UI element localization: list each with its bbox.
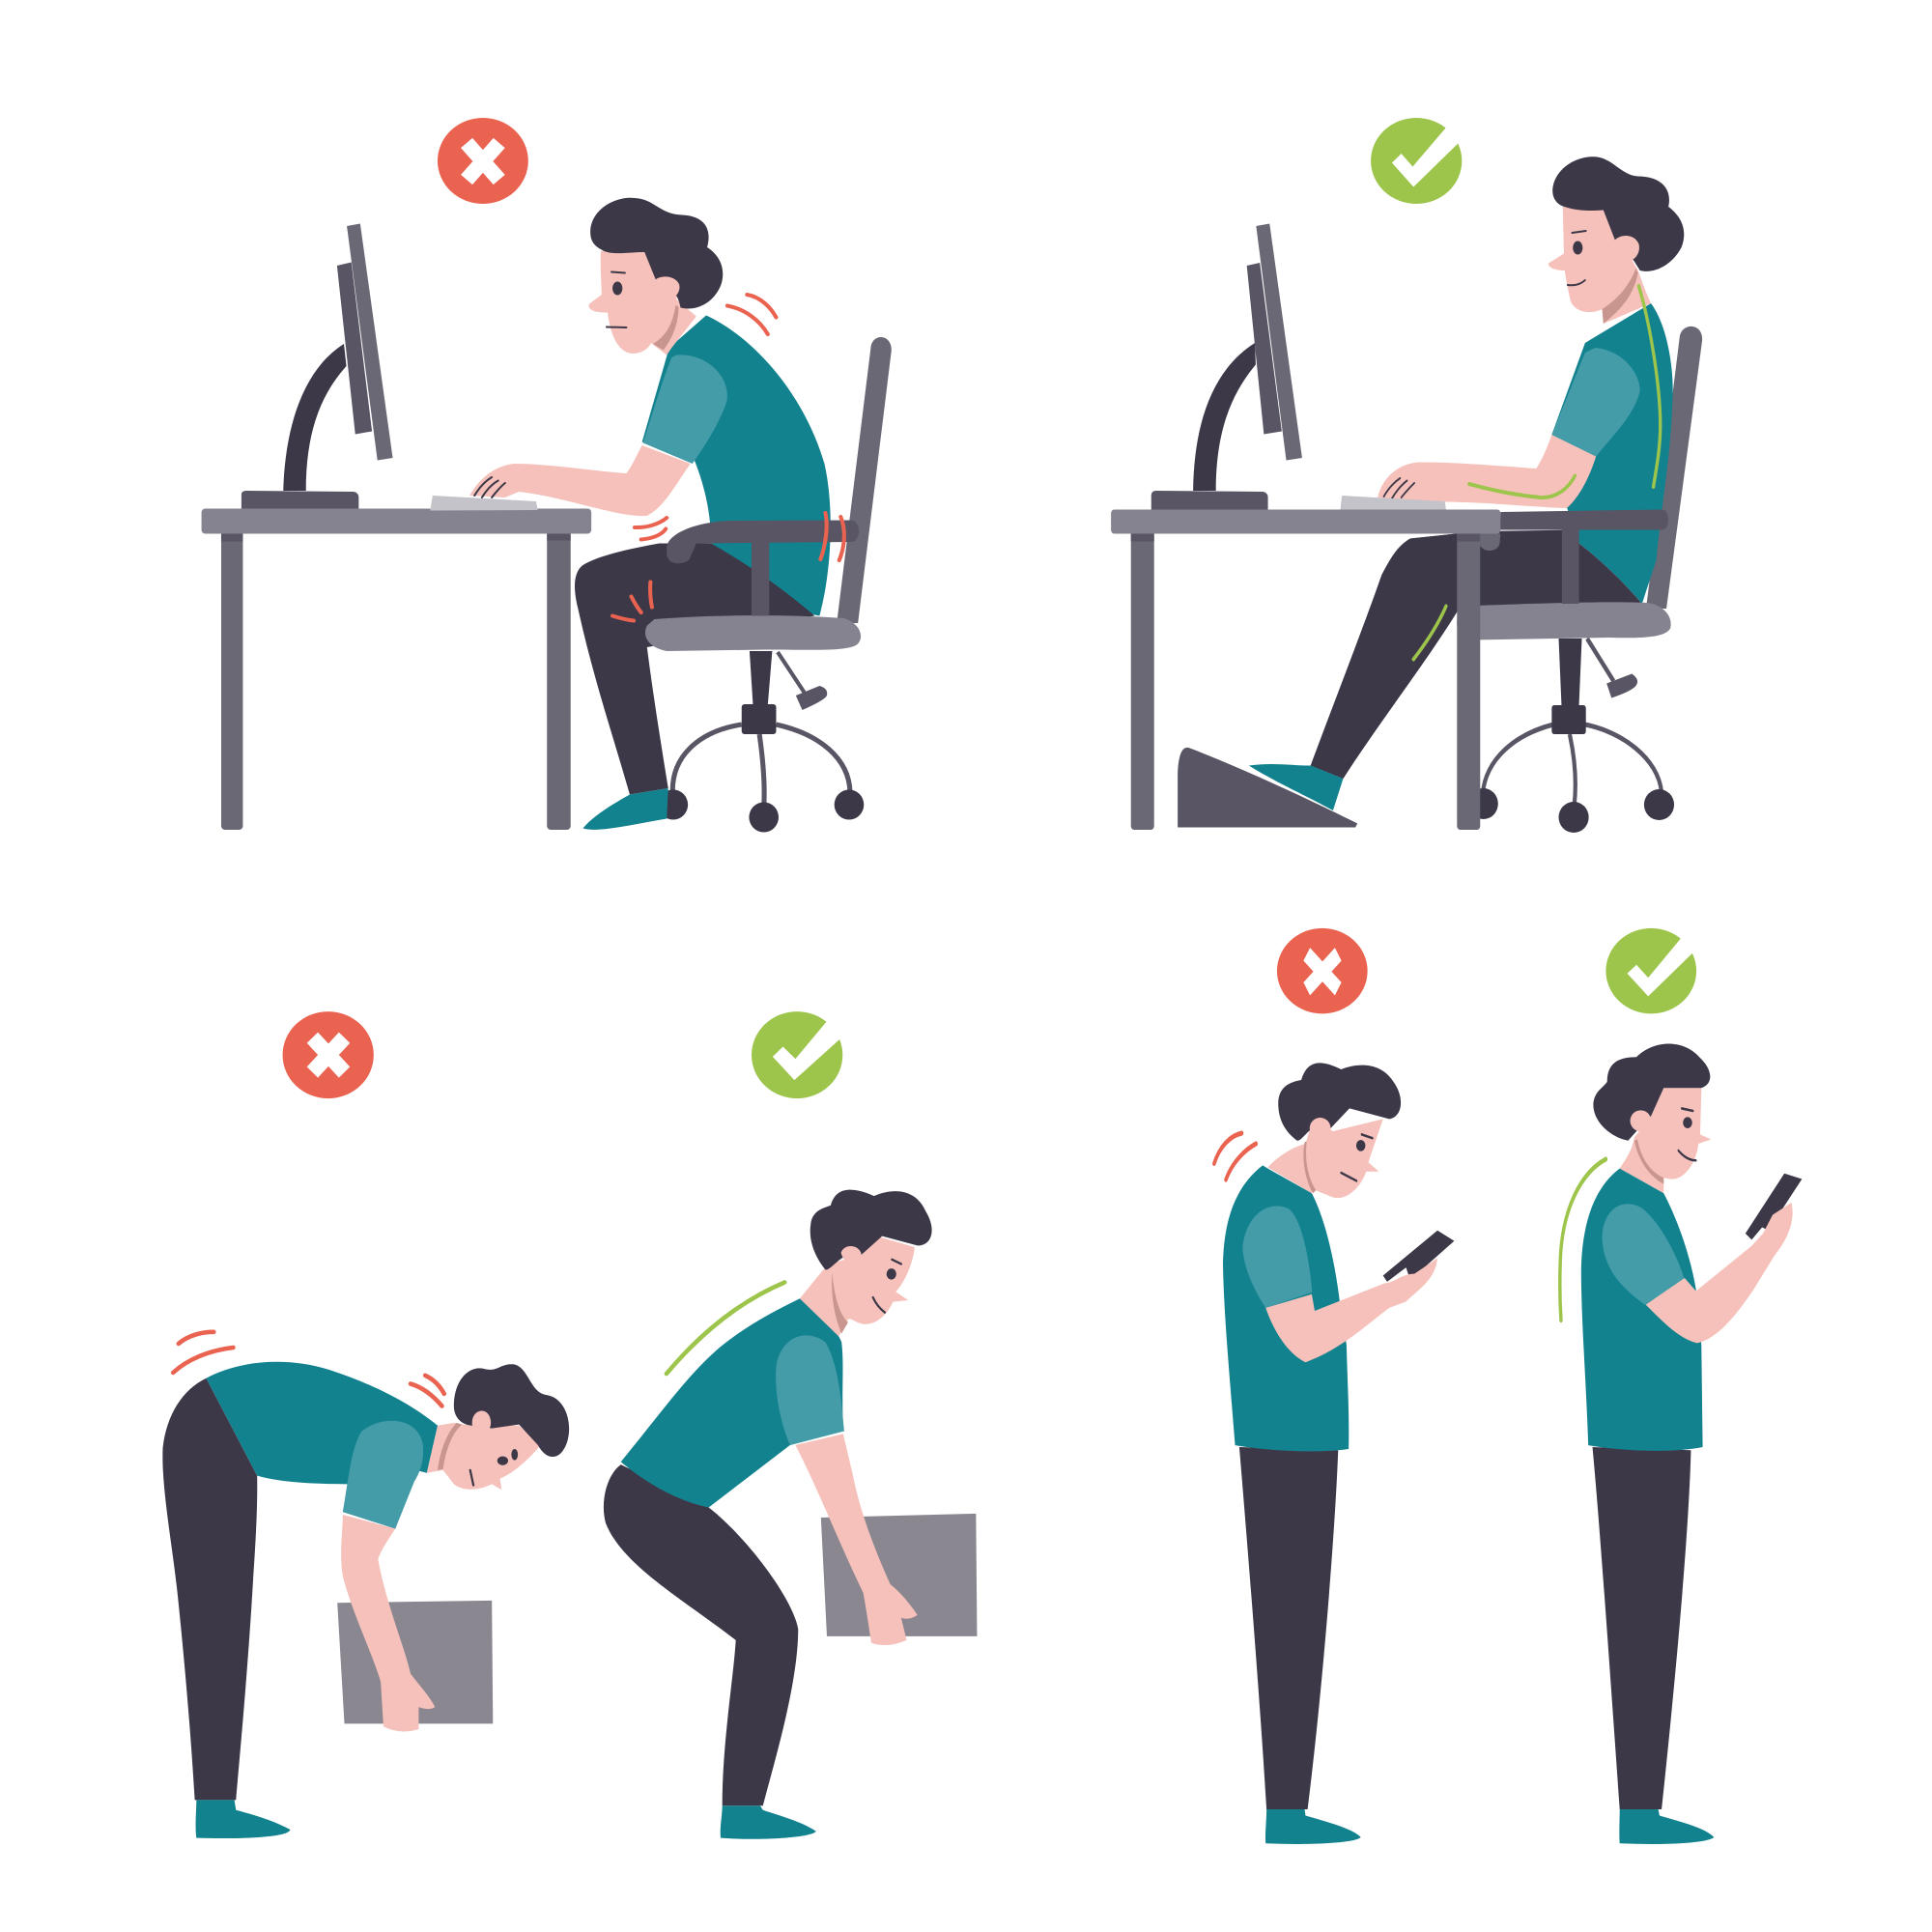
icon: green check badge bbox=[752, 1011, 842, 1098]
panel: bad phone posture bbox=[1214, 928, 1454, 1844]
man holding phone up bbox=[1581, 1044, 1802, 1844]
seated man slouching bbox=[469, 198, 831, 830]
icon: green check badge bbox=[1605, 928, 1696, 1013]
green posture marks bbox=[1413, 286, 1661, 659]
panel: bad lifting posture bbox=[162, 1011, 569, 1838]
phone bbox=[1746, 1174, 1802, 1239]
desk and armrest bbox=[1111, 496, 1668, 830]
red strain marks bbox=[173, 1332, 444, 1406]
icon: green check badge bbox=[1371, 118, 1462, 204]
forearm and hand bbox=[1646, 1203, 1793, 1343]
box bbox=[337, 1601, 493, 1723]
office chair bbox=[659, 337, 892, 833]
man squatting to lift bbox=[604, 1190, 932, 1839]
forearm and hand bbox=[1265, 1259, 1437, 1362]
seated man upright bbox=[1249, 156, 1684, 810]
man looking down at phone bbox=[1223, 1063, 1454, 1844]
icon: red cross badge bbox=[438, 118, 528, 204]
icon: red cross badge bbox=[283, 1011, 374, 1098]
red strain marks bbox=[1214, 1133, 1256, 1179]
panel: good desk posture bbox=[1111, 118, 1702, 833]
panel: bad desk posture bbox=[202, 118, 892, 833]
green spine mark bbox=[667, 1282, 784, 1374]
panel: good lifting posture bbox=[604, 1011, 977, 1839]
man bending at the waist bbox=[162, 1362, 569, 1838]
computer monitor bbox=[242, 224, 393, 510]
office chair bbox=[1468, 327, 1702, 833]
green spine mark bbox=[1560, 1159, 1605, 1321]
computer monitor bbox=[1151, 224, 1302, 510]
red strain marks bbox=[612, 295, 844, 620]
panel: good phone posture bbox=[1560, 928, 1802, 1844]
box bbox=[821, 1514, 977, 1636]
phone bbox=[1383, 1231, 1454, 1282]
icon: red cross badge bbox=[1277, 928, 1368, 1013]
chair seat and armrest bbox=[645, 520, 861, 651]
desk bbox=[202, 496, 591, 830]
foot rest bbox=[1178, 748, 1357, 827]
